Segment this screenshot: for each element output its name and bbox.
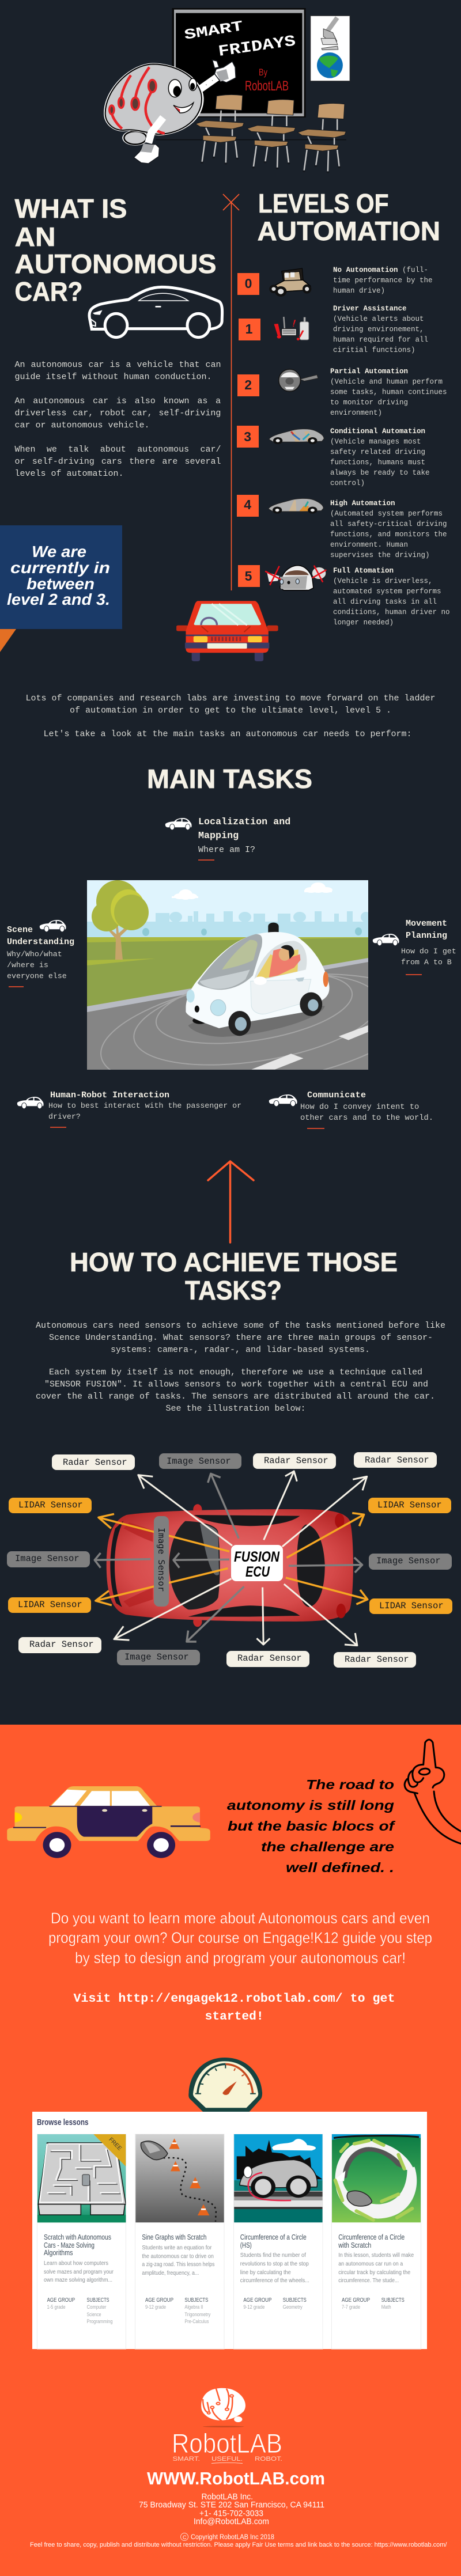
card text: AGE GROUP (145, 2297, 173, 2304)
quote: the road to autonomy (227, 1777, 396, 1875)
fusion ECU box: ECU (245, 1564, 270, 1580)
road (87, 961, 368, 1070)
level 2 (237, 368, 447, 417)
copyright notice: C (183, 2535, 187, 2540)
label: lidar sensor right bottom (369, 1598, 452, 1614)
heading: Main tasks: MAIN TASKS (147, 764, 312, 794)
card text: Circumference of a Circle (338, 2233, 405, 2241)
website address: WWW.RobotLAB.com (147, 2468, 325, 2488)
header illustration: Smart Fridays classroom (104, 8, 350, 173)
link: visit engage k12: started! (205, 2010, 264, 2024)
badge 3 (237, 426, 259, 448)
card text: line by calculating the (240, 2269, 291, 2276)
card text: Sine Graphs with Scratch (142, 2233, 206, 2241)
label: radar sensor 1 (52, 1454, 135, 1470)
car (186, 923, 330, 1037)
badge 5: 5 (245, 569, 252, 584)
label: radar sensor bottom right (334, 1652, 416, 1668)
text block: what an autonomous car is: or self-driving cars there are several (15, 457, 221, 467)
heading: What is an autonomous car: AUTONOMOUS (15, 249, 217, 279)
badge 0 (237, 273, 259, 295)
label: image sensor left: Image Sensor (15, 1554, 80, 1564)
text: Mapping (198, 831, 239, 842)
text: level 1: human required for all (333, 336, 428, 344)
card text: Cars - Maze Solving (44, 2241, 95, 2249)
badge 1 (239, 319, 260, 340)
quote: the road to autonomy: the challenge are (261, 1839, 394, 1854)
card text: the autonomous car to drive on (142, 2253, 214, 2260)
label: image sensor top: Image Sensor (167, 1456, 231, 1467)
text block: sensors and sensor fusion: "SENSOR FUSION". It allows sensors to work together with a central ECU and (44, 1380, 428, 1389)
label: image sensor right (369, 1554, 452, 1570)
card text: In this lesson, students will make (338, 2252, 414, 2259)
grass (87, 937, 368, 942)
card image: cones and dotted path (135, 2134, 224, 2222)
ribbon label: free: FREE (107, 2136, 123, 2152)
icon: white car (269, 1094, 297, 1107)
text: level 2 (330, 368, 447, 417)
card text: Algebra II (184, 2304, 203, 2310)
contact details: Info@RobotLAB.com (194, 2517, 269, 2526)
heading: browse lessons: Browse lessons (37, 2117, 89, 2127)
label: image sensor bottom: Image Sensor (124, 1652, 189, 1662)
card text: 9-12 grade (145, 2304, 166, 2310)
icon: speedometer (188, 2058, 262, 2112)
text: level 3: control) (330, 479, 365, 487)
vertical image sensor label: Image Sensor (156, 1528, 167, 1592)
label: radar sensor bottom left: Radar Sensor (29, 1639, 94, 1650)
heading: What is an autonomous car: AN (15, 222, 55, 252)
orange lidar arrows (96, 1513, 368, 1605)
text (48, 1090, 241, 1128)
orange section background (0, 1725, 461, 2576)
text: from A to B (401, 958, 452, 967)
cream radar arrows (114, 1471, 367, 1646)
text: level 1: (Vehicle alerts about (333, 315, 424, 323)
label: lidar sensor left top: LIDAR Sensor (18, 1500, 83, 1510)
text block: sensors and sensor fusion (36, 1321, 445, 1414)
text: level 2: some tasks, human continues (330, 388, 447, 396)
badge 0: 0 (245, 276, 252, 291)
text block: sensors and sensor fusion: Scence Understanding. What sensors? there are three main groups of sensor- (49, 1333, 433, 1343)
card text: (HS) (240, 2241, 252, 2249)
card text (240, 2233, 309, 2310)
card text: Trigonometry (184, 2312, 211, 2317)
icon: white car (165, 818, 192, 830)
card: circumference with scratch (332, 2134, 421, 2349)
text: Localization and (198, 817, 290, 828)
icon: white car (40, 920, 66, 932)
level 1 (239, 305, 428, 354)
text: Movement (406, 919, 447, 929)
heading: What is an autonomous car (15, 194, 217, 306)
clouds (172, 882, 332, 900)
label: radar sensor bottom left (18, 1637, 101, 1653)
grey image arrows (95, 1473, 362, 1642)
task: localization and mapping (165, 817, 290, 861)
icon: white car (17, 1097, 44, 1109)
card image: car in city (234, 2134, 323, 2222)
text block: what an autonomous car is: levels of automation. (15, 469, 124, 479)
text block: what an autonomous car is: An autonomous car is also known as a (15, 396, 221, 406)
text block: sensors and sensor fusion: Each system by itself is not enough, therefore we use a technique called (49, 1367, 422, 1377)
text (300, 1090, 433, 1129)
card text: circular track by calculating the (338, 2269, 410, 2276)
text: level 5 (333, 567, 450, 627)
logo: RobotLAB brain (201, 2388, 245, 2427)
quote: the road to autonomy: The road to (306, 1777, 394, 1792)
text: level 4: supervises the driving) (330, 551, 430, 559)
badge 5 (238, 565, 260, 587)
card text: Computer (86, 2304, 107, 2310)
text block: sensors and sensor fusion: See the illustration below: (165, 1404, 306, 1414)
contact details: RobotLAB Inc. (202, 2492, 253, 2502)
copyright notice (30, 2533, 447, 2548)
text: everyone else (7, 972, 67, 980)
icon: steering wheel (279, 369, 318, 392)
panel: browse lessons screenshot (32, 2112, 427, 2349)
text: Understanding (7, 937, 74, 947)
text: level 5: all dirving tasks in all (333, 598, 437, 606)
copyright notice: Copyright RobotLAB Inc 2018 (191, 2534, 274, 2541)
diagram: sensor fusion car (7, 1452, 452, 1668)
text: level 3: always be ready to take (330, 469, 430, 477)
text: level 3: safety related driving (330, 448, 425, 456)
card text: own maze solving algorithm... (44, 2276, 112, 2283)
text: level 1 (333, 305, 428, 354)
callout: currently between level 2 and 3: between (27, 575, 95, 593)
text: How do I convey intent to (300, 1103, 419, 1112)
card text (44, 2233, 114, 2324)
link: visit engage k12 (74, 1992, 395, 2024)
contact details: 75 Broadway St. STE 202 San Francisco, CA 94111 (139, 2501, 324, 2510)
text: level 0: time performance by the (333, 276, 433, 285)
icon: old car (269, 268, 311, 297)
call to action text: by step to design and program your autonomous car! (75, 1949, 406, 1967)
text: level 2: to monitor driving (330, 399, 408, 407)
icon: white car (373, 934, 399, 946)
label: image sensor bottom (117, 1650, 200, 1665)
card text: SUBJECTS (283, 2297, 307, 2304)
level 5 (238, 565, 450, 627)
text block: what an autonomous car is: When we talk about autonomous car/ (15, 445, 221, 454)
card image: circular track (332, 2134, 421, 2222)
logo wordmark: RobotLAB: RobotLAB (172, 2428, 282, 2458)
task: scene understanding (7, 920, 74, 987)
badge 2: 2 (244, 377, 252, 392)
blackboard text: Smart Fridays: By (259, 67, 267, 78)
text: level 5: Full Atomation (333, 567, 394, 575)
card text: AGE GROUP (47, 2297, 75, 2304)
card text: circumference of the wheels... (240, 2277, 309, 2284)
text: Human-Robot Interaction (50, 1090, 169, 1100)
card text: AGE GROUP (342, 2297, 370, 2304)
call to action text: Do you want to learn more about Autonomous cars and even (51, 1910, 430, 1927)
text: level 1: Driver Assistance (333, 305, 407, 313)
text (401, 919, 456, 975)
card text: Students write an equation for (142, 2244, 212, 2251)
card text: Geometry (283, 2304, 303, 2310)
callout: currently between level 2 and 3 (0, 525, 122, 652)
fusion ECU box: FUSION (234, 1549, 280, 1565)
text block: ladder of automation intro: Let's take a look at the main tasks an autonomous car needs to perform: (43, 729, 412, 739)
text: Communicate (307, 1090, 366, 1100)
heading: Levels of automation: AUTOMATION (257, 216, 440, 246)
label: lidar sensor left top (9, 1498, 92, 1513)
card text: SUBJECTS (381, 2297, 405, 2304)
badge 3: 3 (244, 429, 251, 444)
text: level 1: ciritial functions) (333, 346, 415, 354)
callout: currently between level 2 and 3: level 2 and 3. (7, 590, 110, 608)
label: radar sensor 2: Radar Sensor (264, 1456, 328, 1466)
text: level 4: environment. Human (330, 541, 408, 549)
heading: How to achieve those tasks: HOW TO ACHIEVE THOSE (70, 1247, 398, 1277)
card text: Math (381, 2304, 391, 2310)
card: circumference HS (234, 2134, 323, 2349)
card: maze solving (37, 2134, 126, 2349)
card text: Algorithms (44, 2248, 73, 2257)
card text: SUBJECTS (86, 2297, 109, 2304)
card text (142, 2233, 214, 2324)
label: lidar sensor left bottom: LIDAR Sensor (18, 1600, 82, 1610)
text: level 3 (330, 427, 430, 487)
label: image sensor left (7, 1551, 90, 1567)
label: radar sensor 2 (253, 1453, 336, 1469)
card text: with Scratch (338, 2241, 371, 2249)
copyright notice: Feel free to share, copy, publish and distribute without restriction. Please apply Fair Use terms and link back to the source: https://www.robotlab.com/ (30, 2541, 447, 2548)
badge 2 (237, 374, 259, 396)
text: level 1: driving environement, (333, 325, 424, 334)
text: level 2: environment) (330, 409, 382, 417)
timeline line with crossed arrow head (223, 194, 239, 590)
heading: Levels of automation: LEVELS OF (258, 188, 388, 218)
brain mascot (104, 60, 236, 164)
card image: maze (37, 2134, 126, 2222)
label: radar sensor 1: Radar Sensor (63, 1457, 127, 1468)
label: radar sensor bottom middle: Radar Sensor (237, 1653, 302, 1664)
text: level 5: longer needed) (333, 619, 394, 627)
label: lidar sensor right top: LIDAR Sensor (377, 1500, 442, 1510)
text (7, 925, 74, 987)
card text: Students find the number of (240, 2252, 306, 2259)
icon: red car front view (176, 601, 278, 661)
quote: the road to autonomy: autonomy is still long (227, 1798, 394, 1813)
blackboard text: Smart Fridays: RobotLAB (245, 78, 289, 94)
text: How do I get (401, 947, 456, 956)
level 0 (237, 266, 433, 297)
text: level 4: functions, and monitors the (330, 531, 447, 539)
fusion ECU box (231, 1545, 283, 1581)
text block: ladder of automation intro (25, 694, 436, 739)
text: level 5: conditions, human driver no (333, 608, 450, 616)
icon: hand pointing up (405, 1740, 461, 1844)
text: level 3: functions, humans must (330, 459, 425, 467)
text: /where is (7, 961, 48, 969)
text block: what an autonomous car is: driverless car, robot car, self-driving (15, 408, 221, 418)
skyline (87, 911, 371, 938)
card text: Programming (86, 2319, 113, 2324)
badge 4 (237, 495, 259, 517)
task: human-robot interaction (17, 1090, 241, 1128)
badge 1: 1 (245, 321, 253, 336)
icon: driverless pod with crossed wheel and pedals (265, 566, 326, 590)
text: level 0 (333, 266, 433, 295)
card text: Pre-Calculus (184, 2319, 209, 2324)
call to action text (48, 1910, 432, 1967)
poster: microscope and globe (311, 16, 350, 81)
card text: 7-7 grade (342, 2304, 360, 2310)
text: level 2: (Vehicle and human perform (330, 378, 443, 386)
contact details: +1- 415-702-3033 (199, 2509, 263, 2518)
card text: Circumference of a Circle (240, 2233, 307, 2241)
heading: How to achieve those tasks (70, 1247, 398, 1305)
text: driver? (48, 1112, 81, 1121)
card text: Scratch with Autonomous (44, 2233, 111, 2241)
chairs (156, 94, 346, 173)
card text: solve mazes and program your (44, 2268, 114, 2275)
text (198, 817, 290, 861)
card text: Science (86, 2312, 101, 2317)
card text: an autonomous car run on a (338, 2260, 403, 2267)
logo wordmark: RobotLAB: ROBOT. (255, 2456, 282, 2463)
heading: Levels of automation (257, 188, 440, 246)
text: level 5: automated system performs (333, 588, 441, 596)
label: image sensor right: Image Sensor (376, 1556, 441, 1566)
card text: SUBJECTS (184, 2297, 209, 2304)
card text: amplitude, frequency, a... (142, 2270, 199, 2276)
icon: yellow taxi (7, 1786, 210, 1858)
text: level 4: High Automation (330, 499, 395, 507)
callout: currently between level 2 and 3: currently in (10, 559, 110, 577)
badge 4: 4 (244, 497, 251, 512)
icon: pedals with warnings (274, 317, 309, 340)
task: communicate (269, 1090, 433, 1129)
text: level 4: all safety-critical driving (330, 520, 447, 528)
icon: car with reclined passenger (269, 498, 323, 514)
arrow: orange up arrow (208, 1161, 254, 1242)
heading: What is an autonomous car: WHAT IS (15, 194, 127, 223)
text: Why/Who/what (7, 950, 62, 959)
heading: How to achieve those tasks: TASKS? (185, 1275, 282, 1305)
text: How to best interact with the passenger or (48, 1101, 241, 1110)
illustration: self-driving car on road (87, 880, 368, 1070)
icon: car with driver (269, 429, 324, 444)
text block: what an autonomous car is (15, 360, 221, 479)
text: level 3: (Vehicle manages most (330, 438, 421, 446)
text block: what an autonomous car is: car or autonomous vehicle. (15, 421, 150, 430)
text: Scene (7, 925, 33, 935)
text: Where am I? (198, 845, 255, 855)
label: radar sensor 3: Radar Sensor (365, 1455, 429, 1465)
text: level 5: (Vehicle is driverless, (333, 577, 433, 585)
text block: what an autonomous car is: guide itself without human conduction. (15, 372, 212, 382)
card text: Learn about how computers (44, 2260, 108, 2267)
level 3 (237, 426, 430, 487)
label: lidar sensor left bottom (8, 1597, 91, 1613)
label: radar sensor bottom middle (226, 1651, 309, 1667)
tree (92, 880, 149, 960)
quote: the road to autonomy: well defined. . (286, 1860, 394, 1875)
text block: ladder of automation intro: Lots of companies and research labs are investing to move forward on the ladder (25, 694, 436, 703)
label: radar sensor 3 (354, 1452, 437, 1468)
text: Planning (406, 931, 447, 941)
blackboard text: Smart Fridays: FRIDAYS (217, 33, 297, 61)
text block: sensors and sensor fusion: cover the all range of tasks. The sensors are distributed all around the car. (36, 1392, 435, 1401)
text: level 0: human drive) (333, 287, 385, 295)
card text: revolutions to stop at the stop (240, 2260, 309, 2267)
logo wordmark: RobotLAB: SMART. (173, 2456, 200, 2463)
text block: ladder of automation intro: of automation in order to get to the ultimate level, level 5 . (70, 706, 391, 715)
card text: 1-5 grade (47, 2304, 66, 2310)
card text: AGE GROUP (243, 2297, 272, 2304)
logo wordmark: RobotLAB: USEFUL. (211, 2456, 243, 2463)
card text: 9-12 grade (243, 2304, 264, 2310)
blackboard text: Smart Fridays (183, 18, 297, 94)
text: level 0: No Autonomation (full- (333, 266, 428, 274)
label: image sensor top (159, 1453, 241, 1469)
text: other cars and to the world. (300, 1113, 433, 1123)
text: level 2: Partial Automation (330, 368, 408, 376)
card text: a zig-zag road. This lesson helps (142, 2261, 214, 2268)
card text (338, 2233, 414, 2310)
link: visit engage k12: Visit http://engagek12.robotlab.com/ to get (74, 1992, 395, 2006)
car top view (107, 1504, 353, 1627)
text: level 4 (330, 499, 447, 559)
card: sine graphs (135, 2134, 224, 2349)
text block: sensors and sensor fusion: systems: camera-, radar-, and lidar-based systems. (111, 1345, 370, 1355)
blackboard text: Smart Fridays: SMART (183, 18, 244, 44)
label: lidar sensor right top (368, 1498, 451, 1513)
contact details (139, 2492, 324, 2526)
level 4 (237, 495, 447, 559)
text: level 3: Conditional Automation (330, 427, 425, 435)
text block: sensors and sensor fusion: Autonomous cars need sensors to achieve some of the tasks mentioned before like (36, 1321, 445, 1331)
icon: white outline car (89, 287, 222, 338)
card text: circumference. The stude... (338, 2277, 399, 2284)
label: radar sensor bottom right: Radar Sensor (345, 1654, 409, 1665)
blackboard (172, 8, 306, 118)
quote: the road to autonomy: but the basic blocs of (228, 1819, 396, 1833)
text: level 4: (Automated system performs (330, 510, 443, 518)
task: movement planning (373, 919, 456, 975)
callout: currently between level 2 and 3: We are (32, 543, 86, 560)
label: lidar sensor right bottom: LIDAR Sensor (379, 1601, 444, 1611)
text block: what an autonomous car is: An autonomous car is a vehicle that can (15, 360, 221, 370)
heading: What is an autonomous car: CAR? (15, 276, 83, 306)
vertical image sensor label (154, 1516, 169, 1607)
